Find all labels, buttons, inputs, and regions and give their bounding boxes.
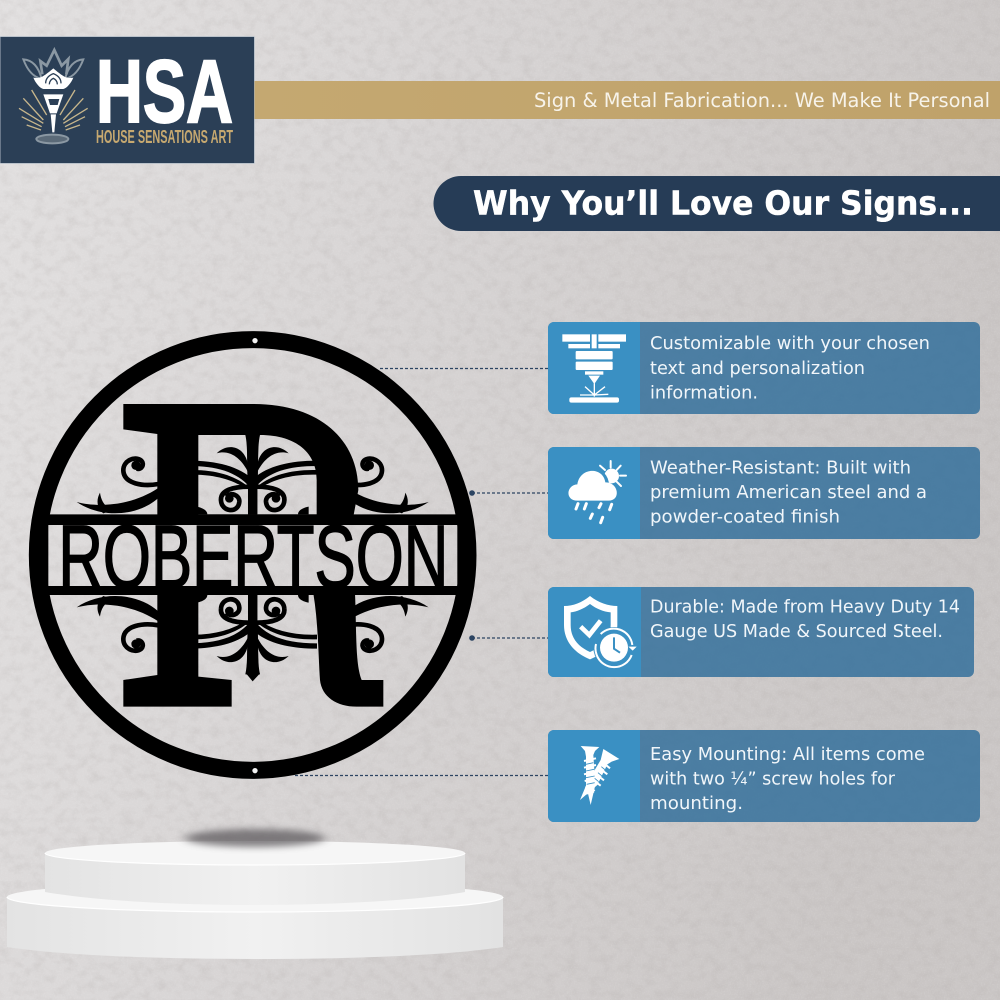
letter R upper part: [123, 404, 358, 517]
card text: text and personalization: [650, 359, 865, 379]
heading pill: [433, 176, 1000, 231]
card: weather-resistant: [548, 447, 980, 539]
ornament: bottom left scrolls: [77, 595, 260, 674]
card text: Gauge US Made & Sourced Steel.: [650, 622, 943, 642]
metal sign: Robertson monogram: [37, 338, 468, 773]
icon: cloud, sun and rain: [568, 461, 626, 523]
icon: shield with clock: [564, 596, 637, 668]
card text: Weather-Resistant: Built with: [650, 458, 911, 478]
card text: [650, 745, 925, 814]
logo wordmark: HSA: [96, 41, 233, 141]
name band: [40, 514, 465, 595]
logo panel: HSA House Sensations Art: [0, 36, 254, 164]
card text: [650, 598, 960, 642]
gold banner with tagline: [254, 81, 1000, 119]
letter R lower part: [123, 593, 383, 707]
card text: with two ¼” screw holes for: [650, 770, 896, 790]
icon: laser cutter: [562, 334, 626, 403]
card text: Easy Mounting: All items come: [650, 745, 925, 765]
icon: screws: [580, 746, 619, 805]
ornament: top right scrolls: [245, 435, 429, 514]
heading pill: Why You’ll Love Our Signs...: [473, 184, 973, 222]
card text: premium American steel and a: [650, 483, 927, 503]
card text: information.: [650, 384, 758, 404]
card text: Durable: Made from Heavy Duty 14: [650, 598, 960, 618]
card text: [650, 458, 927, 528]
leader line: customizable: [380, 368, 548, 370]
card text: Customizable with your chosen: [650, 334, 930, 354]
leader line: easy mounting: [295, 774, 548, 776]
icon: torch emblem: [19, 50, 88, 143]
card text: mounting.: [650, 794, 743, 814]
lower tier: [7, 882, 503, 959]
card text: [650, 334, 930, 404]
ring: [37, 340, 468, 770]
name text: ROBERTSON: [58, 507, 448, 606]
ornament: bottom right scrolls: [245, 595, 429, 674]
ornament: bottom fleur tip: [246, 673, 260, 681]
ornament: top left scrolls: [77, 435, 260, 514]
mounting hole: top: [252, 338, 258, 343]
leader line: durable: [469, 635, 548, 641]
upper tier: [45, 841, 465, 905]
card: durable: [548, 587, 974, 677]
logo tagline: HOUSE SENSATIONS ART: [96, 126, 233, 147]
card text: powder-coated finish: [650, 508, 840, 528]
shadow of sign: [185, 829, 325, 847]
card: easy mounting: [548, 730, 980, 822]
gold banner with tagline: Sign & Metal Fabrication... We Make It Personal: [534, 89, 990, 112]
podium: [7, 829, 503, 959]
mounting hole: bottom: [252, 768, 258, 773]
card: customizable: [548, 322, 980, 414]
leader line: weather-resistant: [469, 490, 548, 496]
